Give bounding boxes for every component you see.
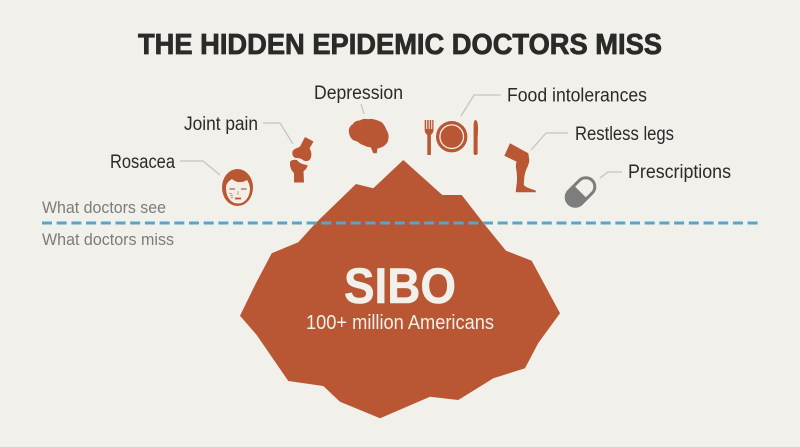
label: Rosacea: Rosacea [110,152,175,173]
label: Restless legs [531,124,674,150]
iceberg: SIBO [240,160,560,418]
label: Joint pain: Joint pain [184,114,258,135]
icon: brain [349,119,389,153]
label: Depression: Depression [314,83,403,104]
label: what doctors see: What doctors see [42,198,166,217]
label: Depression [314,83,403,114]
label: Food intolerances: Food intolerances [507,86,647,106]
label: Prescriptions: Prescriptions [628,162,731,183]
iceberg heading: SIBO: SIBO [344,258,456,314]
icon: leg [504,143,536,192]
waterline [42,222,758,224]
label: Rosacea [110,152,220,175]
icon: joint [290,137,314,182]
label: Joint pain [184,114,293,144]
icon: face [222,169,253,206]
label: what doctors miss: What doctors miss [42,230,174,249]
label: Food intolerances [461,86,647,116]
iceberg subheading: 100+ million Americans [306,311,494,334]
icon: plate and cutlery [425,120,478,155]
title: THE HIDDEN EPIDEMIC DOCTORS MISS [138,29,662,61]
icon: pill [560,172,601,212]
label: Restless legs: Restless legs [575,124,674,145]
